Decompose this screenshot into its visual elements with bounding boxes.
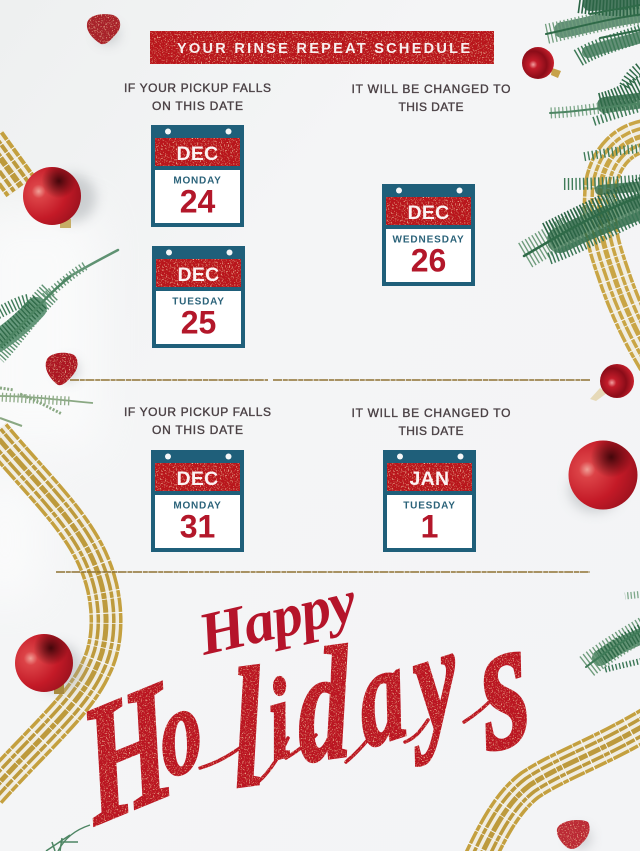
ornament: glitter heart top: [87, 14, 120, 44]
title banner: [150, 31, 494, 64]
evergreen: bottom twig: [46, 825, 90, 851]
heading: first row right: THIS DATE: [398, 100, 464, 114]
calendar: Dec 24: [151, 125, 244, 227]
calendar: Dec 31: [151, 450, 244, 552]
soft background light patches: [0, 210, 100, 600]
calendar: Dec 25: DEC: [177, 264, 220, 286]
calendar: Dec 25: [152, 246, 245, 348]
heading: first row left: IF YOUR PICKUP FALLS: [124, 81, 271, 95]
heading: second row left: IF YOUR PICKUP FALLS: [124, 405, 271, 419]
calendar: Dec 26: DEC: [407, 202, 450, 224]
heading: second row right: [352, 406, 510, 438]
calendar: Dec 31: DEC: [176, 468, 219, 490]
calendar: Dec 24: 24: [180, 184, 216, 220]
heading: second row left: ON THIS DATE: [152, 423, 243, 437]
ornament: red ball right: [568, 440, 638, 510]
calendar: Jan 1: TUESDAY: [403, 500, 456, 512]
calendar: Dec 24: DEC: [176, 143, 219, 165]
calendar: Dec 26: WEDNESDAY: [392, 234, 464, 246]
title banner: YOUR RINSE REPEAT SCHEDULE: [177, 41, 470, 57]
ornament: red ball lower left: [15, 634, 73, 694]
heading: first row left: [124, 81, 271, 113]
evergreen: top right: [546, 2, 640, 58]
calendar: Dec 26: [382, 184, 475, 286]
calendar: Jan 1: JAN: [410, 468, 449, 490]
calendar: Dec 26: 26: [411, 242, 446, 278]
heading: second row right: THIS DATE: [398, 424, 464, 438]
gold ribbon: top-left fragment: [0, 141, 21, 186]
ornament: glitter heart bottom: [557, 820, 590, 849]
lettering: Happy: Happy: [191, 567, 363, 668]
calendar: Jan 1: [383, 450, 476, 552]
calendar: Dec 25: 25: [181, 304, 216, 340]
gold ribbon: bottom-right sweep: [478, 722, 640, 851]
calendar: Dec 25: TUESDAY: [172, 296, 225, 308]
calendar: Dec 31: MONDAY: [173, 500, 222, 512]
divider lower: [56, 571, 590, 573]
evergreen: left twig: [0, 388, 93, 426]
gold ribbon: right sweep: [600, 135, 640, 372]
ornament: small glossy ball right: [590, 364, 634, 401]
calendar: Jan 1: 1: [421, 508, 438, 544]
heading: second row left: [124, 405, 271, 437]
evergreen: left branch: [0, 250, 118, 355]
gold ribbon: left sweep: [0, 433, 106, 793]
calendar: Dec 31: 31: [180, 508, 215, 544]
heading: second row right: IT WILL BE CHANGED TO: [352, 406, 510, 420]
divider upper: [70, 379, 590, 381]
calendar: Dec 24: MONDAY: [173, 176, 222, 186]
heading: first row right: IT WILL BE CHANGED TO: [352, 82, 510, 96]
evergreen: lower right: [586, 594, 640, 670]
evergreen: right middle upper: [550, 68, 640, 122]
ornament: glitter heart left: [46, 353, 78, 385]
heading: first row left: ON THIS DATE: [152, 99, 243, 113]
evergreen: right middle lower: [524, 148, 640, 259]
ornament: red ball upper left: [23, 167, 81, 228]
heading: first row right: [352, 82, 510, 114]
ornament: small glossy ball top right: [522, 47, 561, 79]
